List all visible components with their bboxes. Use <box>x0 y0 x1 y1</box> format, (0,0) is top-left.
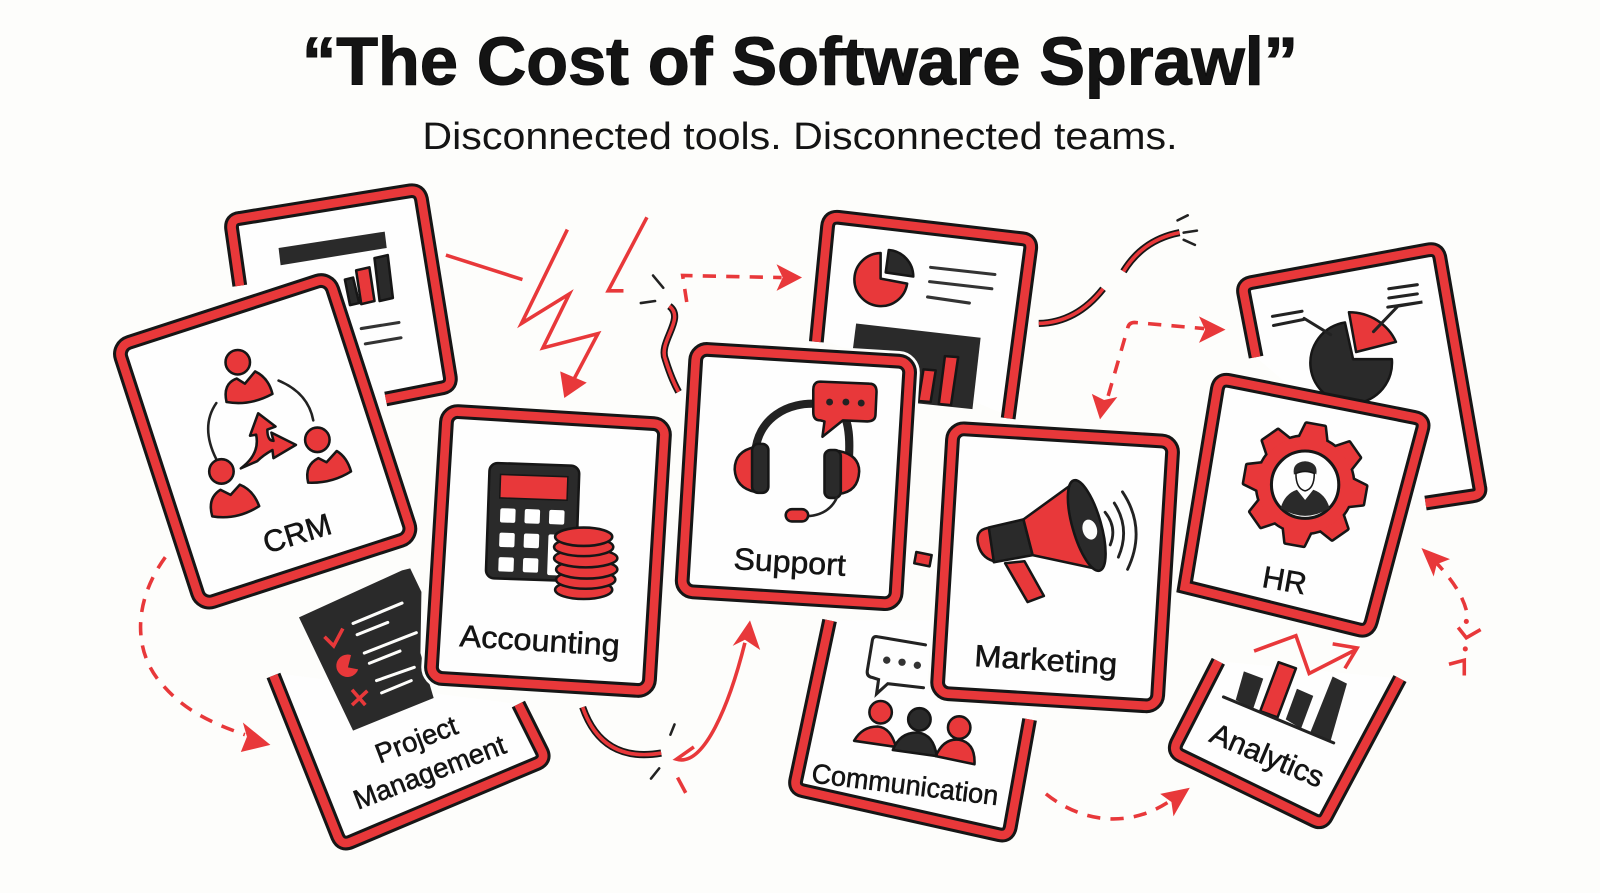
icon: exploded pie chart <box>1272 285 1422 404</box>
panel: CRM card <box>117 277 413 605</box>
connector: broken wire upper right <box>1039 215 1197 323</box>
connector: broken wire near support <box>664 306 679 392</box>
icon: megaphone <box>977 476 1136 602</box>
panel: project management card <box>273 568 543 843</box>
panel: marketing card <box>937 428 1173 706</box>
label: Support <box>733 542 847 583</box>
icon: dark bar chart <box>847 323 981 409</box>
icon: speech bubble <box>867 637 926 694</box>
connector: lightning break between documents and accounting <box>446 217 663 398</box>
label: Accounting <box>459 619 621 663</box>
arrow: dashed CRM to project management <box>141 557 270 752</box>
connector: broken wire to support <box>583 707 686 793</box>
panel: back document with exploded pie <box>1244 250 1480 504</box>
label: Analytics <box>1205 717 1329 794</box>
icon: team <box>854 701 975 764</box>
panel: back document with pie chart and bars <box>816 217 1031 418</box>
title: “The Cost of Software Sprawl” <box>302 25 1298 100</box>
text lines <box>928 267 995 303</box>
icon: gear with person <box>1243 423 1367 546</box>
arrow: dashed two-way between marketing and analysis document <box>1092 316 1226 419</box>
label: Communication <box>810 758 1000 811</box>
panel: support card <box>682 349 910 604</box>
icon: task list document <box>299 568 434 731</box>
panel: communication card <box>794 620 1033 837</box>
arrow: dashed to analytics <box>1046 788 1190 819</box>
label: Marketing <box>974 639 1118 682</box>
icon: CRM people network <box>208 350 351 517</box>
icon: bar chart header <box>279 232 401 344</box>
subtitle: Disconnected tools. Disconnected teams. <box>422 115 1178 157</box>
arrow: dashed to document <box>683 264 802 302</box>
arrow: red curve to support <box>677 620 760 760</box>
panel: HR card <box>1185 380 1423 630</box>
label: Project <box>371 710 462 769</box>
arrow: dashed to HR <box>1421 548 1481 676</box>
panel: back document with bar chart <box>232 191 450 399</box>
label: HR <box>1260 560 1309 601</box>
panel: accounting card <box>431 411 665 691</box>
connector: small red fragment <box>914 552 932 566</box>
label: Management <box>349 729 510 815</box>
icon: bar chart with trend arrow <box>1223 636 1357 743</box>
label: CRM <box>259 507 336 560</box>
panel: analytics card <box>1173 636 1400 827</box>
icon: headset with chat bubble <box>735 382 877 521</box>
icon: calculator and coins <box>486 463 617 599</box>
icon: pie chart <box>854 250 913 306</box>
